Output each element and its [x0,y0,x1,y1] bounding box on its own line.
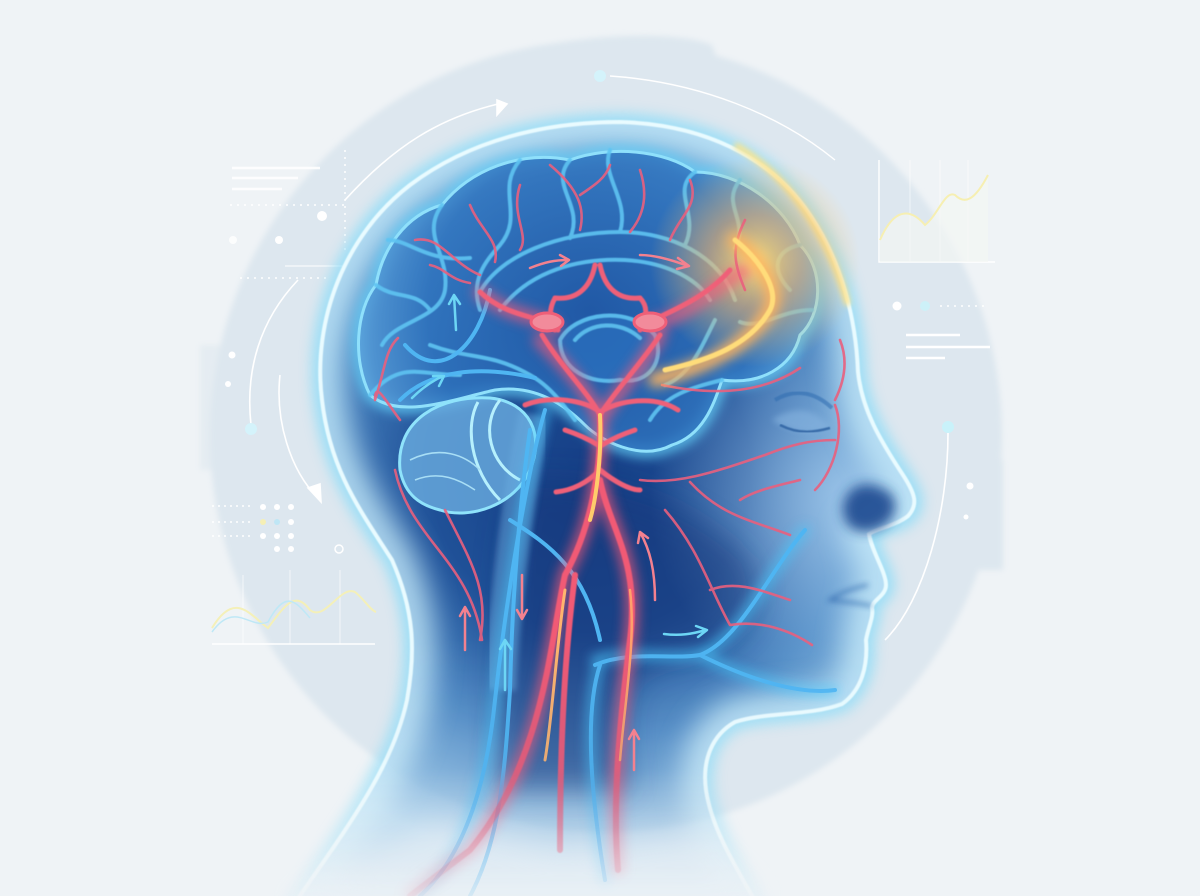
lips [830,585,872,606]
face highlight [664,332,912,668]
hot artery on right [655,240,773,380]
brain folds [370,150,812,420]
blue vessels [400,290,835,896]
nose shadow [843,485,895,532]
backdrop disc behind head [200,36,1003,832]
head silhouette [290,122,914,896]
data panel: lower-left wave chart [212,570,376,644]
warm highlight [650,157,860,367]
head outer glow [290,122,914,896]
inner rim glow [290,122,914,896]
facial features [772,393,895,606]
golden core of trunk [590,415,600,520]
dark neck and jaw shading [498,478,756,790]
bottom fade of neck [280,820,770,896]
warm rim on crown [735,145,848,305]
brain body [359,151,818,451]
main trunk [410,415,632,896]
central branches [480,265,730,492]
illustration: glowing head profile with brain and blood vessels [204,36,1003,896]
cortical branches [375,165,845,645]
data panel: top-left text lines and dots [229,150,345,278]
brain [359,150,860,451]
head rim light [290,122,914,896]
data panel: lower-left dot matrix [212,504,343,553]
brain stem tube [500,415,535,690]
head fill [290,122,914,896]
data panel: left orbit arrows and dots [250,76,835,502]
node dots [225,70,606,435]
eye [772,411,830,432]
data panel: top-right line chart [879,160,995,262]
red arteries [375,165,845,896]
flow arrows [412,255,707,770]
brain glow [359,151,818,451]
artery glow [410,270,745,896]
data panel: right text lines and dots [885,301,990,640]
cerebellum [400,398,536,513]
